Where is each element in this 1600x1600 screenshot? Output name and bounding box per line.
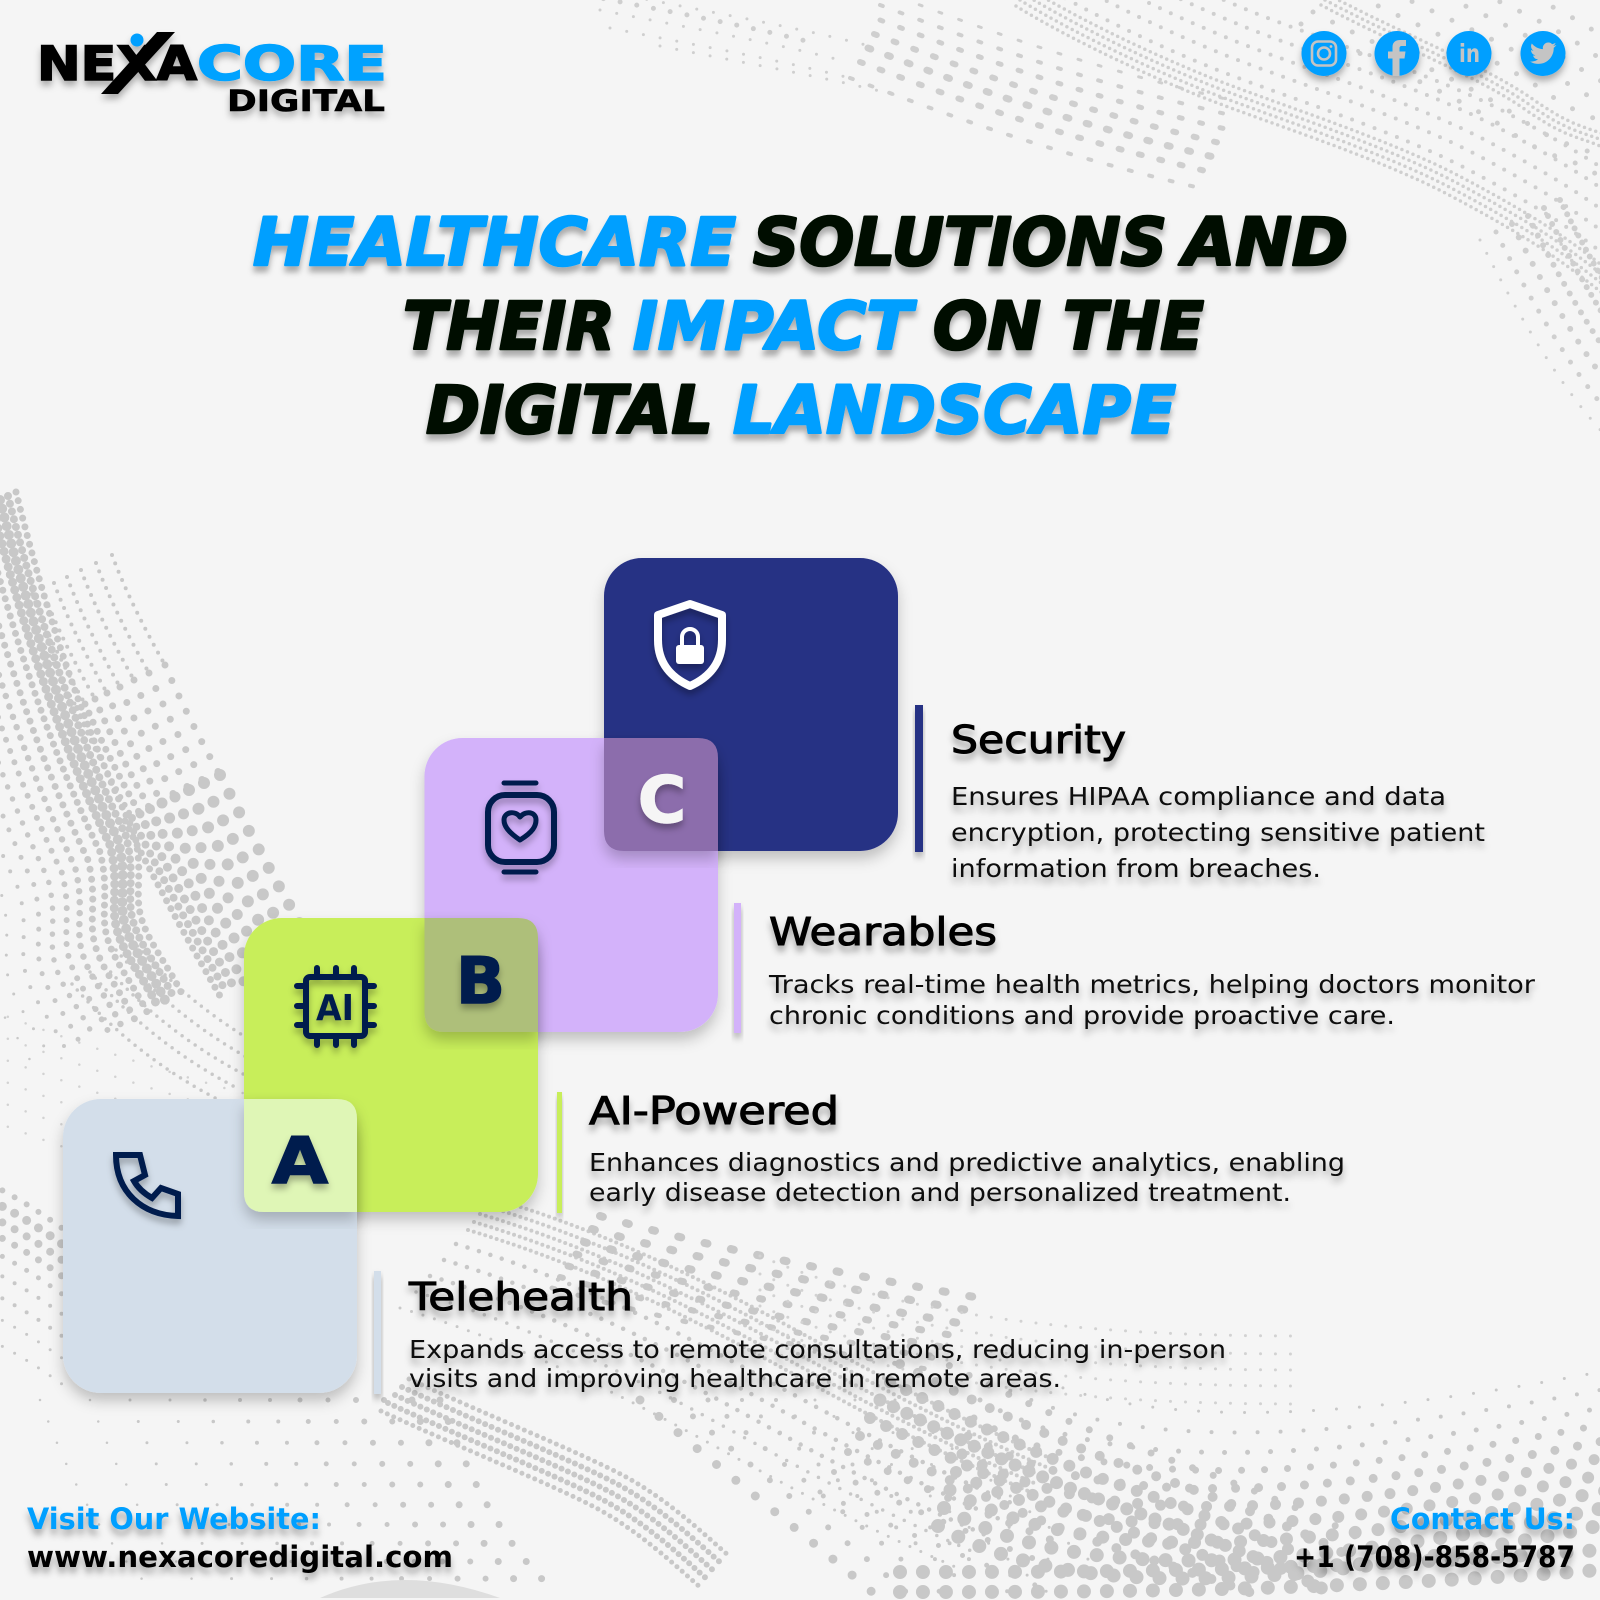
footer: website: Visit Our Website: (27, 1502, 321, 1536)
title: THE (1063, 288, 1204, 365)
text block: security: Security (951, 718, 1126, 762)
text block: AI-powered (557, 1089, 1345, 1213)
text block: wearables: chronic conditions and provide proactive care. (769, 1001, 1395, 1030)
icon: twitter (1520, 31, 1566, 76)
icon: smartwatch with heart (488, 783, 554, 872)
title: HEALTHCARE (253, 204, 736, 281)
overlap tile with letter C (604, 738, 718, 851)
overlap tile with letter A (244, 1099, 357, 1212)
title: AND (1178, 204, 1348, 281)
title: THEIR (403, 288, 615, 365)
logo: Nexacore Digital (37, 32, 387, 118)
icon: shield with lock (658, 604, 722, 686)
icon: phone (116, 1155, 178, 1216)
icon: linkedin (1446, 31, 1492, 76)
title (253, 204, 1348, 449)
icon: linkedin: in (1459, 39, 1480, 68)
icon: facebook (1374, 31, 1420, 76)
text block: wearables (734, 903, 1536, 1033)
social icons (1302, 31, 1566, 76)
icon: instagram (1302, 31, 1346, 76)
overlap tile with letter A: A (272, 1125, 329, 1199)
overlap tile with letter B: B (456, 945, 505, 1019)
text block: telehealth (374, 1271, 1226, 1394)
footer: contact: Contact Us: (1390, 1502, 1575, 1536)
text block: wearables: Tracks real-time health metrics, helping doctors monitor (768, 970, 1536, 999)
text block: AI-powered: AI-Powered (589, 1089, 839, 1133)
text block: telehealth: Expands access to remote consultations, reducing in-person (409, 1335, 1226, 1364)
panel: stacked squares (63, 558, 898, 1393)
overlap tile with letter B (424, 918, 538, 1032)
text block: AI-powered: early disease detection and personalized treatment. (589, 1178, 1291, 1207)
icon: AI chip: AI (316, 988, 354, 1029)
footer: contact: +1 (708)-858-5787 (1294, 1540, 1575, 1574)
footer: website (27, 1502, 453, 1574)
text block: security (915, 705, 1485, 883)
icon: AI chip (297, 968, 374, 1045)
footer: contact (1294, 1502, 1575, 1574)
logo: Nexacore Digital: DIGITAL (227, 84, 385, 118)
text block: security: encryption, protecting sensitive patient (951, 818, 1485, 847)
card C: security (604, 558, 898, 851)
text block: telehealth: visits and improving healthcare in remote areas. (409, 1364, 1061, 1393)
card A: AI-powered (244, 918, 538, 1212)
text block: AI-powered: Enhances diagnostics and predictive analytics, enabling (589, 1148, 1345, 1177)
title: ON (933, 288, 1041, 365)
text block: security: information from breaches. (951, 854, 1321, 883)
title: LANDSCAPE (733, 372, 1176, 449)
overlap tile with letter C: C (638, 764, 686, 838)
footer: website: www.nexacoredigital.com (27, 1540, 453, 1574)
card B: wearables (424, 738, 718, 1032)
title: SOLUTIONS (753, 204, 1167, 281)
text block: security: Ensures HIPAA compliance and data (951, 782, 1446, 811)
text block: telehealth: Telehealth (408, 1275, 633, 1319)
logo: Nexacore Digital: CORE (197, 37, 387, 92)
logo: Nexacore Digital: NEXA (37, 37, 198, 92)
title: IMPACT (633, 288, 917, 365)
title: DIGITAL (426, 372, 713, 449)
text block: wearables: Wearables (769, 910, 997, 954)
card: telehealth (63, 1099, 357, 1393)
